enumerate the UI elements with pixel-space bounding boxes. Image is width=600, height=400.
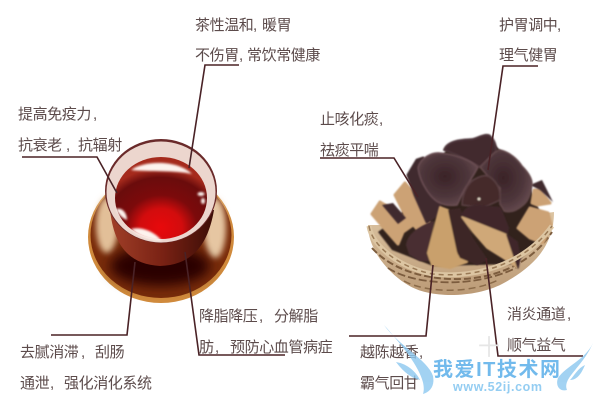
callout: stomach care: 理气健胃 — [499, 47, 557, 64]
callout: cough relief: , — [379, 111, 383, 128]
callout: lipids and blood pressure: 分解脂 — [274, 308, 318, 325]
callout: aging aroma: 越陈越香 — [360, 344, 418, 361]
callout: lipids and blood pressure: 预防心血管病症 — [230, 339, 333, 356]
callout: stomach-warming — [189, 17, 320, 168]
callout: anti-inflammatory: 顺气益气 — [507, 337, 566, 354]
callout: aging aroma: 霸气回甘 — [360, 375, 419, 392]
callout: digestion: , — [50, 375, 54, 392]
callout: digestion: 强化消化系统 — [64, 375, 152, 392]
centre cap — [462, 176, 500, 208]
left cap — [418, 153, 478, 205]
callout: cough relief — [320, 111, 418, 197]
basket — [368, 140, 554, 295]
watermark url: www.52ij.com — [452, 380, 542, 394]
callout: lipids and blood pressure: 降脂降压 — [199, 308, 257, 325]
callout: stomach care: 护胃调中 — [499, 17, 557, 34]
cup body — [110, 210, 214, 266]
front pieces — [407, 206, 520, 268]
dark pieces — [382, 135, 553, 224]
watermark wings — [384, 325, 593, 394]
tea surface — [115, 157, 207, 239]
callout: digestion — [20, 262, 152, 392]
callout: lipids and blood pressure: , — [215, 339, 219, 356]
callout: immunity — [18, 106, 122, 193]
callout: stomach care — [488, 17, 561, 170]
watermark faint marks: 十 — [478, 335, 500, 360]
callout: stomach care: , — [557, 17, 561, 34]
callout: digestion: 刮肠 — [95, 344, 125, 361]
callout: anti-inflammatory: , — [567, 306, 571, 323]
callout: stomach-warming: 暖胃 — [262, 17, 291, 34]
callout: anti-inflammatory — [486, 258, 583, 356]
callout: stomach-warming: 不伤胃 — [195, 47, 239, 64]
callout: immunity: , — [93, 106, 97, 123]
cup rim — [105, 139, 217, 243]
highlights — [116, 163, 205, 241]
callout: digestion: 去腻消滞 — [20, 344, 78, 361]
callout: immunity: 抗衰老 — [18, 137, 62, 154]
right cap — [480, 150, 532, 212]
callout: lipids and blood pressure — [185, 252, 333, 356]
callout: stomach-warming: , — [239, 47, 243, 64]
callout: immunity: 提高免疫力 — [18, 106, 91, 123]
callout: immunity: 抗辐射 — [78, 137, 122, 154]
callout: lipids and blood pressure: , — [259, 308, 263, 325]
callout: aging aroma: , — [419, 344, 423, 361]
tan pieces — [372, 183, 551, 244]
callout: stomach-warming: 茶性温和 — [195, 17, 253, 34]
callout: lipids and blood pressure: 肪 — [199, 339, 214, 356]
saucer — [88, 171, 234, 303]
watermark — [384, 325, 593, 394]
callout: cough relief: 祛痰平喘 — [320, 142, 379, 159]
watermark name: 我爱IT技术网 — [433, 358, 560, 381]
callout: stomach-warming: 常饮常健康 — [247, 47, 320, 64]
callout: digestion: , — [81, 344, 85, 361]
callout: aging aroma — [349, 265, 433, 392]
callout: stomach-warming: , — [253, 17, 257, 34]
basket of dried fruit — [368, 135, 554, 295]
callout: anti-inflammatory: 消炎通道 — [507, 306, 565, 323]
tea cup on saucer — [88, 139, 234, 303]
callout: immunity: , — [66, 137, 70, 154]
callout: digestion: 通泄 — [20, 375, 49, 392]
callout: cough relief: 止咳化痰 — [320, 111, 378, 128]
basket front rim — [369, 226, 552, 275]
